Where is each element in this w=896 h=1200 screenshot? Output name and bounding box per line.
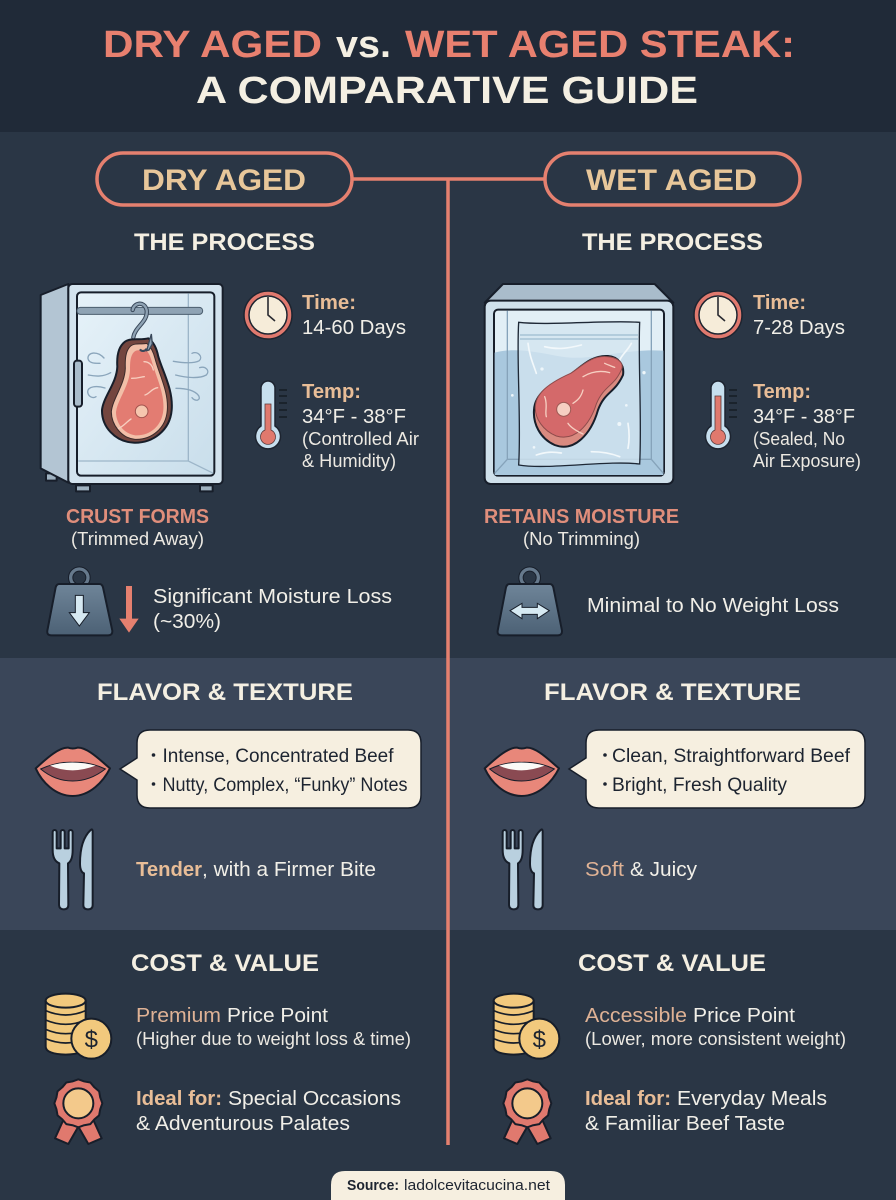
source tag: ladolcevitacucina.net <box>404 1177 551 1194</box>
speech bubble: wet flavor notes <box>569 730 865 808</box>
icon: thermometer, wet <box>706 381 737 449</box>
text: price, wet <box>585 1005 846 1049</box>
icon: lips, wet <box>485 748 559 796</box>
text: moisture loss <box>153 586 392 633</box>
text: ideal for, dry: Ideal for: <box>136 1088 222 1110</box>
callout: retains moisture: (No Trimming) <box>523 529 640 549</box>
column badge: dry aged: DRY AGED <box>142 164 306 197</box>
icon: coins, dry <box>46 994 111 1059</box>
title: WET AGED STEAK: <box>405 24 795 66</box>
section band: cost and value <box>0 930 896 1200</box>
text: texture, wet: Soft <box>585 859 624 881</box>
text: time and temperature, dry: (Controlled Air <box>302 429 419 449</box>
speech bubble: wet flavor notes: Clean, Straightforward Beef <box>612 746 851 767</box>
heading: the process, dry: THE PROCESS <box>134 229 315 256</box>
heading: cost and value, wet: COST & VALUE <box>578 950 766 977</box>
icon: thermometer, dry <box>256 381 287 449</box>
text: time and temperature, dry: 14-60 Days <box>302 317 406 339</box>
icon: coins, wet: $ <box>533 1026 546 1053</box>
title: A COMPARATIVE GUIDE <box>196 70 698 112</box>
illustration: dry aging fridge with hanging steak <box>41 284 223 491</box>
icon: award ribbon, dry <box>54 1079 102 1144</box>
text: time and temperature, wet: 7-28 Days <box>753 317 845 339</box>
speech bubble: dry flavor notes: Intense, Concentrated Beef <box>162 746 394 767</box>
callout: crust forms: (Trimmed Away) <box>71 529 204 549</box>
callout: crust forms: CRUST FORMS <box>66 506 209 528</box>
text: price, dry <box>136 1005 411 1049</box>
icon: lips, dry <box>36 748 110 796</box>
text: price, dry: Price Point <box>227 1005 328 1027</box>
icon: weight with level arrow <box>498 569 562 635</box>
text: texture, dry: Tender <box>136 859 202 881</box>
text: ideal for, wet: Ideal for: <box>585 1088 671 1110</box>
text: price, wet: Accessible <box>585 1005 687 1027</box>
text: price, dry: (Higher due to weight loss & time) <box>136 1029 411 1049</box>
section band: the process <box>0 132 896 658</box>
column badge: wet aged <box>545 153 800 205</box>
icon: coins, dry: $ <box>85 1026 98 1053</box>
text: moisture loss: Significant Moisture Loss <box>153 586 392 608</box>
column badge: wet aged: WET AGED <box>586 164 757 197</box>
header band <box>0 0 896 132</box>
text: time and temperature, wet: Time: <box>753 292 806 314</box>
heading: flavor and texture, wet: FLAVOR & TEXTURE <box>544 679 801 706</box>
text: time and temperature, dry: & Humidity) <box>302 451 396 471</box>
speech bubble: dry flavor notes: Nutty, Complex, “Funky” Notes <box>162 775 408 796</box>
text: time and temperature, wet <box>753 292 861 471</box>
text: time and temperature, dry <box>302 292 419 471</box>
icon: clock, dry <box>244 291 292 339</box>
column badge: dry aged <box>97 153 352 205</box>
title: DRY AGED <box>103 24 322 66</box>
text: texture, dry <box>136 859 376 881</box>
center divider and connector <box>352 179 544 1145</box>
text: texture, wet: & Juicy <box>630 859 697 881</box>
text: ideal for, wet: Everyday Meals <box>677 1088 827 1110</box>
text: ideal for, wet: & Familiar Beef Taste <box>585 1113 785 1135</box>
speech bubble: dry flavor notes <box>120 730 421 808</box>
text: time and temperature, dry: Temp: <box>302 381 361 403</box>
text: moisture loss: (~30%) <box>153 611 221 633</box>
text: time and temperature, wet: Temp: <box>753 381 811 403</box>
illustration: vacuum sealed steak in water <box>485 284 673 484</box>
text: weight loss: Minimal to No Weight Loss <box>587 595 839 617</box>
text: texture, dry: , with a Firmer Bite <box>202 859 376 881</box>
title: vs. <box>336 24 391 66</box>
source tag <box>331 1171 565 1200</box>
callout: retains moisture: RETAINS MOISTURE <box>484 506 679 528</box>
title <box>103 24 795 112</box>
text: price, dry: Premium <box>136 1005 221 1027</box>
text: ideal for, wet <box>585 1088 827 1135</box>
text: price, wet: Price Point <box>693 1005 795 1027</box>
icon: weight with down arrows <box>47 569 139 635</box>
text: time and temperature, dry: 34°F - 38°F <box>302 406 406 428</box>
callout: crust forms <box>66 506 209 549</box>
text: texture, wet <box>585 859 697 881</box>
icon: award ribbon, wet <box>503 1079 551 1144</box>
text: price, wet: (Lower, more consistent weight) <box>585 1029 846 1049</box>
heading: cost and value, dry: COST & VALUE <box>131 950 319 977</box>
heading: the process, wet: THE PROCESS <box>582 229 763 256</box>
icon: coins, wet <box>494 994 559 1059</box>
icon: fork and knife, dry <box>53 829 93 909</box>
section band: flavor and texture <box>0 658 896 930</box>
source tag: Source: <box>347 1177 399 1194</box>
speech bubble: wet flavor notes: Bright, Fresh Quality <box>612 775 788 796</box>
text: time and temperature, wet: 34°F - 38°F <box>753 406 855 428</box>
text: ideal for, dry: Special Occasions <box>228 1088 401 1110</box>
text: ideal for, dry <box>136 1088 401 1135</box>
heading: flavor and texture, dry: FLAVOR & TEXTURE <box>97 679 353 706</box>
text: time and temperature, dry: Time: <box>302 292 356 314</box>
text: time and temperature, wet: (Sealed, No <box>753 429 845 449</box>
callout: retains moisture <box>484 506 679 549</box>
icon: clock, wet <box>694 291 742 339</box>
text: ideal for, dry: & Adventurous Palates <box>136 1113 350 1135</box>
text: time and temperature, wet: Air Exposure) <box>753 451 861 471</box>
icon: fork and knife, wet <box>503 829 543 909</box>
